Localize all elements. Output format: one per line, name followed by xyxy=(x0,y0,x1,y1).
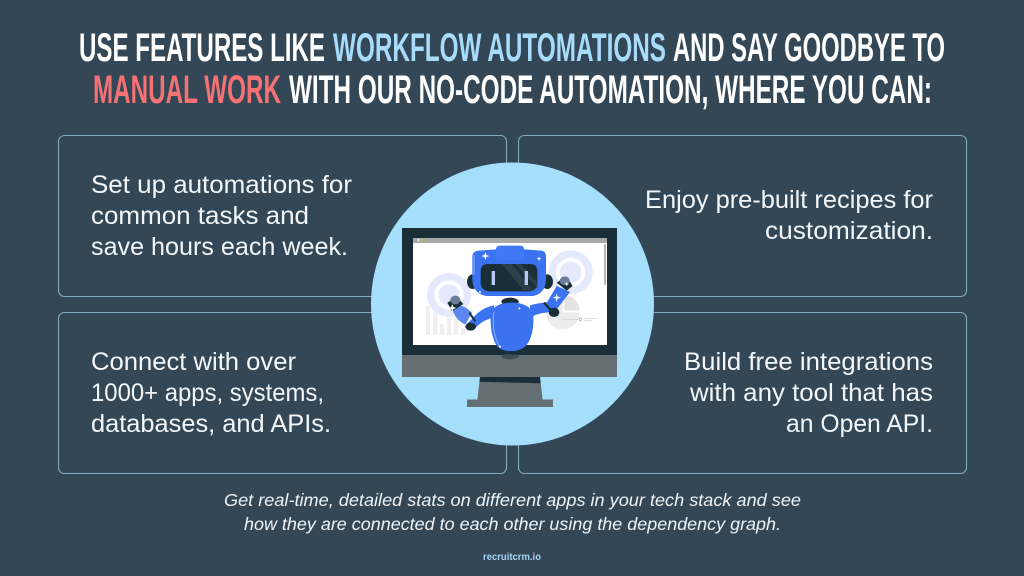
title: MANUAL WORK xyxy=(93,68,281,112)
arms xyxy=(467,305,494,329)
panel: free integrations xyxy=(518,312,966,474)
head xyxy=(472,249,546,296)
icon: monitor xyxy=(402,228,617,407)
panel: set up automations: Set up automations for xyxy=(91,171,352,199)
panel: set up automations: save hours each week. xyxy=(91,233,348,261)
panel: pre-built recipes xyxy=(518,136,966,296)
caption xyxy=(224,490,801,534)
robot drawing, in zoomed coordinates xyxy=(426,246,597,359)
panel: connect apps: databases, and APIs. xyxy=(91,410,331,438)
panel: connect apps xyxy=(58,312,506,474)
panel: pre-built recipes: customization. xyxy=(765,217,933,245)
panel: set up automations xyxy=(58,136,506,296)
caption: Get real-time, detailed stats on different apps in your tech stack and see xyxy=(224,490,801,510)
visor xyxy=(481,264,537,291)
neck and body xyxy=(501,298,519,306)
panel: free integrations: Build free integrations xyxy=(684,348,933,376)
panel: pre-built recipes: Enjoy pre-built recipes for xyxy=(645,186,933,214)
panel: connect apps: 1000+ apps, systems, xyxy=(91,379,324,407)
caption: how they are connected to each other using the dependency graph. xyxy=(244,514,781,534)
panel: free integrations: an Open API. xyxy=(786,410,933,438)
footer: website: recruitcrm.io xyxy=(483,552,541,563)
chart backdrops on screen xyxy=(426,254,597,335)
ears xyxy=(467,274,478,289)
title xyxy=(79,26,945,112)
circle backdrop xyxy=(371,162,654,446)
panel: set up automations: common tasks and xyxy=(91,202,309,230)
title: USE FEATURES LIKE xyxy=(79,26,325,70)
panel: free integrations: with any tool that has xyxy=(689,379,933,407)
sparkles xyxy=(448,252,569,348)
panel: connect apps: Connect with over xyxy=(91,348,296,376)
illustration: robot in monitor xyxy=(371,162,654,446)
title: WORKFLOW AUTOMATIONS xyxy=(333,26,666,70)
eyes xyxy=(492,271,495,285)
